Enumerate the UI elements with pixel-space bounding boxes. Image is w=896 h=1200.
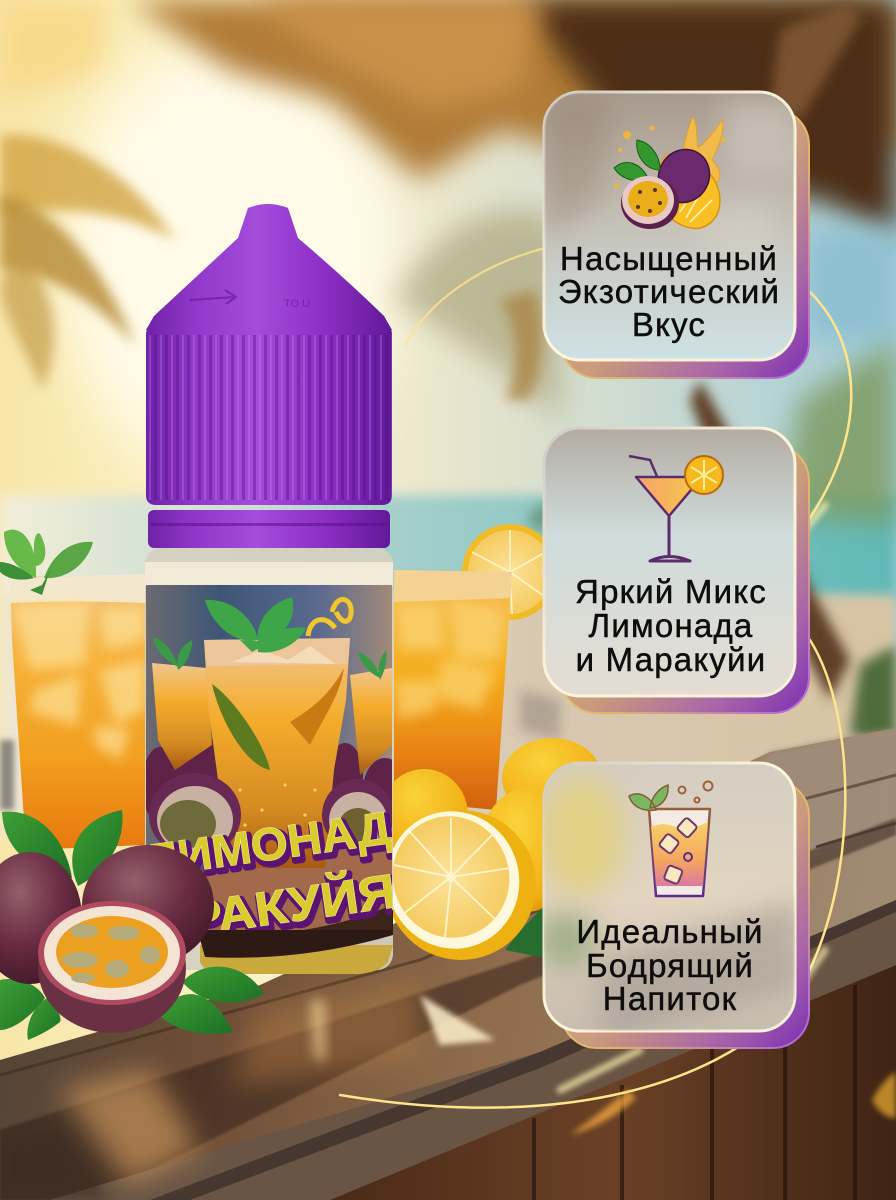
whole passion fruit, left xyxy=(0,852,82,984)
leaves below fruit xyxy=(0,967,264,1040)
whole passion fruit, right xyxy=(82,845,214,965)
lemon peel in glass xyxy=(290,668,344,745)
central glass of lemonade xyxy=(204,638,350,868)
lime slice in glass xyxy=(212,684,270,770)
card 2 offset back plate xyxy=(561,445,809,713)
bubbles xyxy=(238,783,317,832)
glass of iced lemonade, right xyxy=(394,570,512,810)
lemon half xyxy=(369,794,537,966)
leaf under lemons xyxy=(505,905,545,958)
mint on the left glass xyxy=(0,530,93,595)
cap nozzle xyxy=(146,204,392,330)
purple fruits behind the glasses xyxy=(146,738,392,815)
cap ribbed body xyxy=(146,320,392,505)
card 1 text: Вкус xyxy=(632,306,706,343)
card 3 text: Бодрящий xyxy=(586,947,754,984)
golden light swirl xyxy=(340,248,851,1108)
label title xyxy=(150,812,392,930)
card 2 text xyxy=(575,573,767,678)
card 2 text: Лимонада xyxy=(589,607,753,644)
label title: ЛИМОНАД xyxy=(141,801,394,887)
glass of iced lemonade, left xyxy=(9,574,145,850)
wooden table xyxy=(0,728,896,1200)
card 2 frosted panel xyxy=(544,428,795,696)
card 1 blurred backdrop xyxy=(544,92,795,254)
small side glass, right of label xyxy=(350,668,392,775)
lens flares xyxy=(570,1072,896,1135)
label title: ЛИМОНАД xyxy=(144,805,397,891)
cut passion fruit, label right xyxy=(322,779,394,851)
bottle cap skirt xyxy=(148,510,390,548)
card 1 text: Насыщенный xyxy=(560,240,778,277)
whole lemons behind xyxy=(380,738,602,912)
card 1 offset back plate xyxy=(561,109,809,378)
card 3 frosted panel xyxy=(544,763,795,1031)
gold base of the liquid xyxy=(200,945,393,974)
cap embossed marks xyxy=(190,290,310,310)
icon: cocktail xyxy=(629,456,723,561)
card 3 text xyxy=(576,913,764,1017)
central mint sprig xyxy=(205,597,306,653)
cut passion fruit, label left xyxy=(149,773,241,843)
bottle shoulder highlight xyxy=(145,562,393,586)
lemon curl xyxy=(308,599,351,636)
dark label band xyxy=(196,910,393,958)
cut passion fruit xyxy=(38,901,186,1033)
icon: passion fruit and lemon with splash xyxy=(614,117,726,229)
card 1 text: Экзотический xyxy=(558,273,780,310)
label title: МАРАКУЙЯ xyxy=(102,863,399,958)
cap embossed marks: TO U xyxy=(284,298,310,310)
feature card 3 xyxy=(538,763,809,1048)
card 3 text: Напиток xyxy=(603,980,737,1017)
bottle glass body xyxy=(145,548,393,970)
product label xyxy=(146,585,392,930)
card 1 frosted panel xyxy=(544,92,795,360)
card 2 text: Яркий Микс xyxy=(575,573,767,610)
icon: iced drink xyxy=(629,782,712,896)
cap collar line xyxy=(150,523,388,526)
leaves behind fruit xyxy=(2,810,122,886)
feature card 2 xyxy=(544,428,809,713)
label title: МАРАКУЙЯ xyxy=(105,867,402,962)
side mint sprigs xyxy=(153,637,387,680)
lemon slice on the right glass rim xyxy=(462,524,558,620)
card 3 blurred backdrop xyxy=(538,775,800,1040)
feature card 1 xyxy=(544,92,809,378)
card 3 text: Идеальный xyxy=(576,913,764,950)
card 2 text: и Маракуйи xyxy=(576,641,766,678)
card 1 text xyxy=(558,240,780,343)
card 3 offset back plate xyxy=(561,780,809,1048)
bottle xyxy=(145,204,393,974)
passion fruits group xyxy=(0,810,264,1040)
small side glass, left of label xyxy=(152,663,212,770)
